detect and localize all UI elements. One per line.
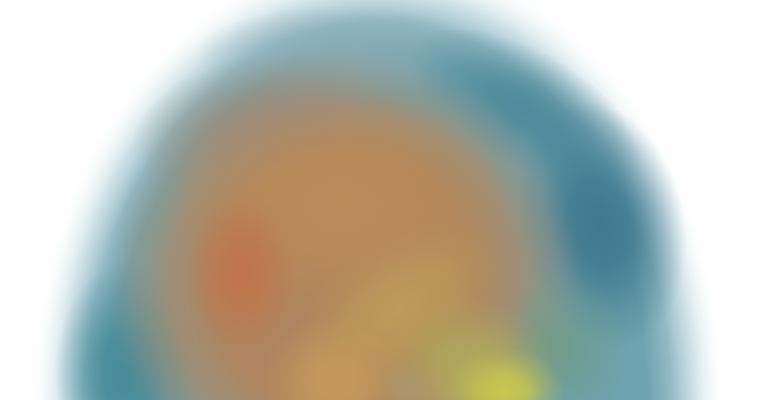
olive teal right shoulder (490, 270, 630, 400)
olive yellow glow (385, 295, 555, 400)
continent muted upper edge (125, 45, 395, 205)
lower tan area (260, 315, 410, 400)
ocean band upper right (395, 30, 655, 200)
ocean lower left (55, 260, 205, 400)
red-orange patch (187, 192, 297, 352)
yellow-green highlight (445, 347, 565, 400)
continent warm centre (170, 90, 510, 320)
continent brown mass (105, 50, 585, 400)
grey-blue ocean above the continent (195, 5, 495, 105)
grey-tan spot at bottom (376, 360, 440, 400)
dark ocean on the right (495, 95, 695, 355)
tan yellow band (285, 220, 515, 400)
